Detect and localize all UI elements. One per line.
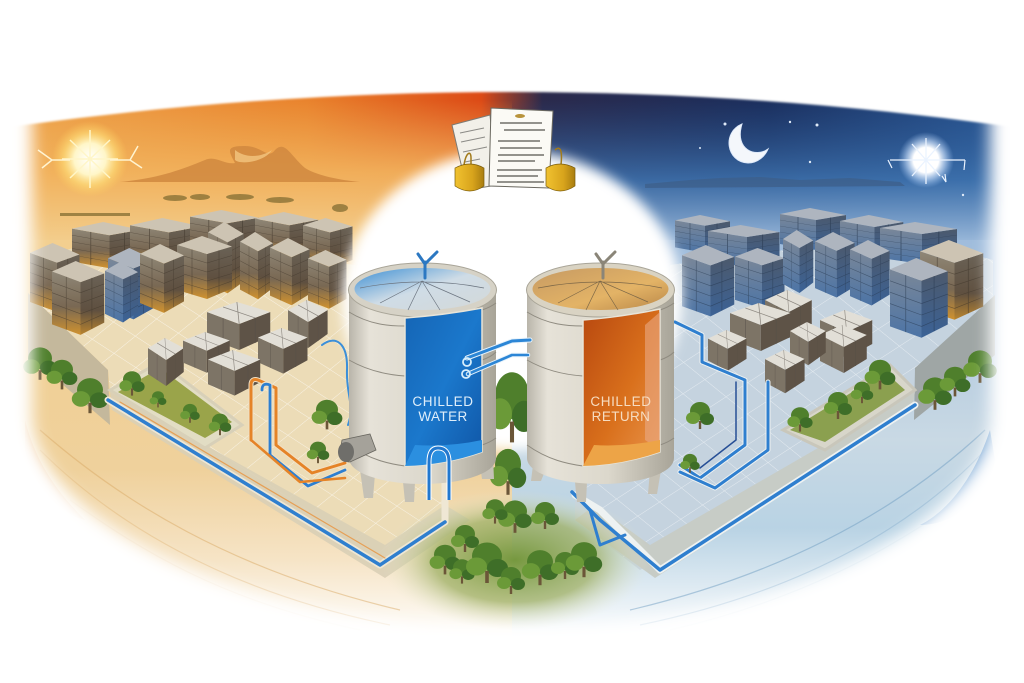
cool garden planter xyxy=(783,360,915,450)
tank body xyxy=(349,290,496,484)
warm cooling towers xyxy=(30,210,352,335)
tank valve xyxy=(418,252,437,278)
padlock left xyxy=(455,153,484,191)
infographic scene: day and night thermal storage plant xyxy=(20,90,1003,628)
cool chiller units xyxy=(708,290,872,393)
tank valve xyxy=(596,252,615,278)
tank: chilled return xyxy=(526,252,674,502)
label: CHILLED xyxy=(412,394,474,409)
tank top xyxy=(532,268,668,310)
sky xyxy=(20,90,1003,240)
cool side plaza xyxy=(604,248,993,570)
bottom ripple lines xyxy=(40,430,985,630)
warm shrubs by wall xyxy=(23,347,108,413)
cool cooling towers xyxy=(675,208,983,338)
moon xyxy=(729,124,768,163)
tank bands xyxy=(527,312,583,466)
tank rim xyxy=(348,263,496,317)
ground: warm side xyxy=(0,240,512,640)
drain cylinder xyxy=(340,434,376,462)
warm side pipes xyxy=(108,341,445,565)
label: CHILLED xyxy=(590,394,652,409)
warm plaza tiles xyxy=(42,260,442,537)
stars xyxy=(699,121,964,196)
cool plaza tiles xyxy=(586,250,993,557)
cool side water edge xyxy=(920,430,995,525)
cool side pipes xyxy=(572,322,915,570)
warm garden planter xyxy=(110,362,242,448)
tank legs xyxy=(531,465,661,502)
warm side plaza xyxy=(42,248,442,544)
shrubs beside tanks xyxy=(307,400,714,473)
tank legs xyxy=(360,457,494,502)
tank body xyxy=(527,290,674,484)
center garden trees xyxy=(430,499,602,594)
tank rim xyxy=(526,263,674,317)
night horizon xyxy=(645,177,905,188)
white arc above panorama xyxy=(0,0,1024,128)
warm sand corner xyxy=(26,426,64,498)
panorama scene xyxy=(20,90,1003,626)
tank: chilled water xyxy=(338,252,496,502)
cool retaining wall xyxy=(914,295,995,420)
paved walkways xyxy=(110,392,915,578)
distant savanna trees xyxy=(60,194,348,216)
tank: chilled return: RETURN xyxy=(592,409,650,424)
tree between tanks xyxy=(488,372,536,495)
return water cutaway xyxy=(583,309,660,466)
mountains xyxy=(120,146,360,182)
center garden xyxy=(380,490,650,630)
night star burst xyxy=(888,132,965,188)
warm chiller units xyxy=(148,300,328,396)
tank top xyxy=(354,268,490,310)
connecting pipes between tanks xyxy=(462,340,530,378)
contract documents with padlocks xyxy=(452,108,575,191)
water cutaway xyxy=(405,308,482,466)
ground: cool side xyxy=(512,240,1024,640)
cool shrubs by wall xyxy=(918,350,997,410)
back document xyxy=(452,115,497,190)
padlock right xyxy=(546,148,575,191)
white dome xyxy=(342,150,682,450)
warm retaining wall xyxy=(28,293,110,425)
sun xyxy=(38,121,142,197)
front document xyxy=(489,108,553,188)
tank bands xyxy=(349,312,405,466)
tank: chilled water: WATER xyxy=(418,409,468,424)
inlet pipe xyxy=(429,448,449,500)
